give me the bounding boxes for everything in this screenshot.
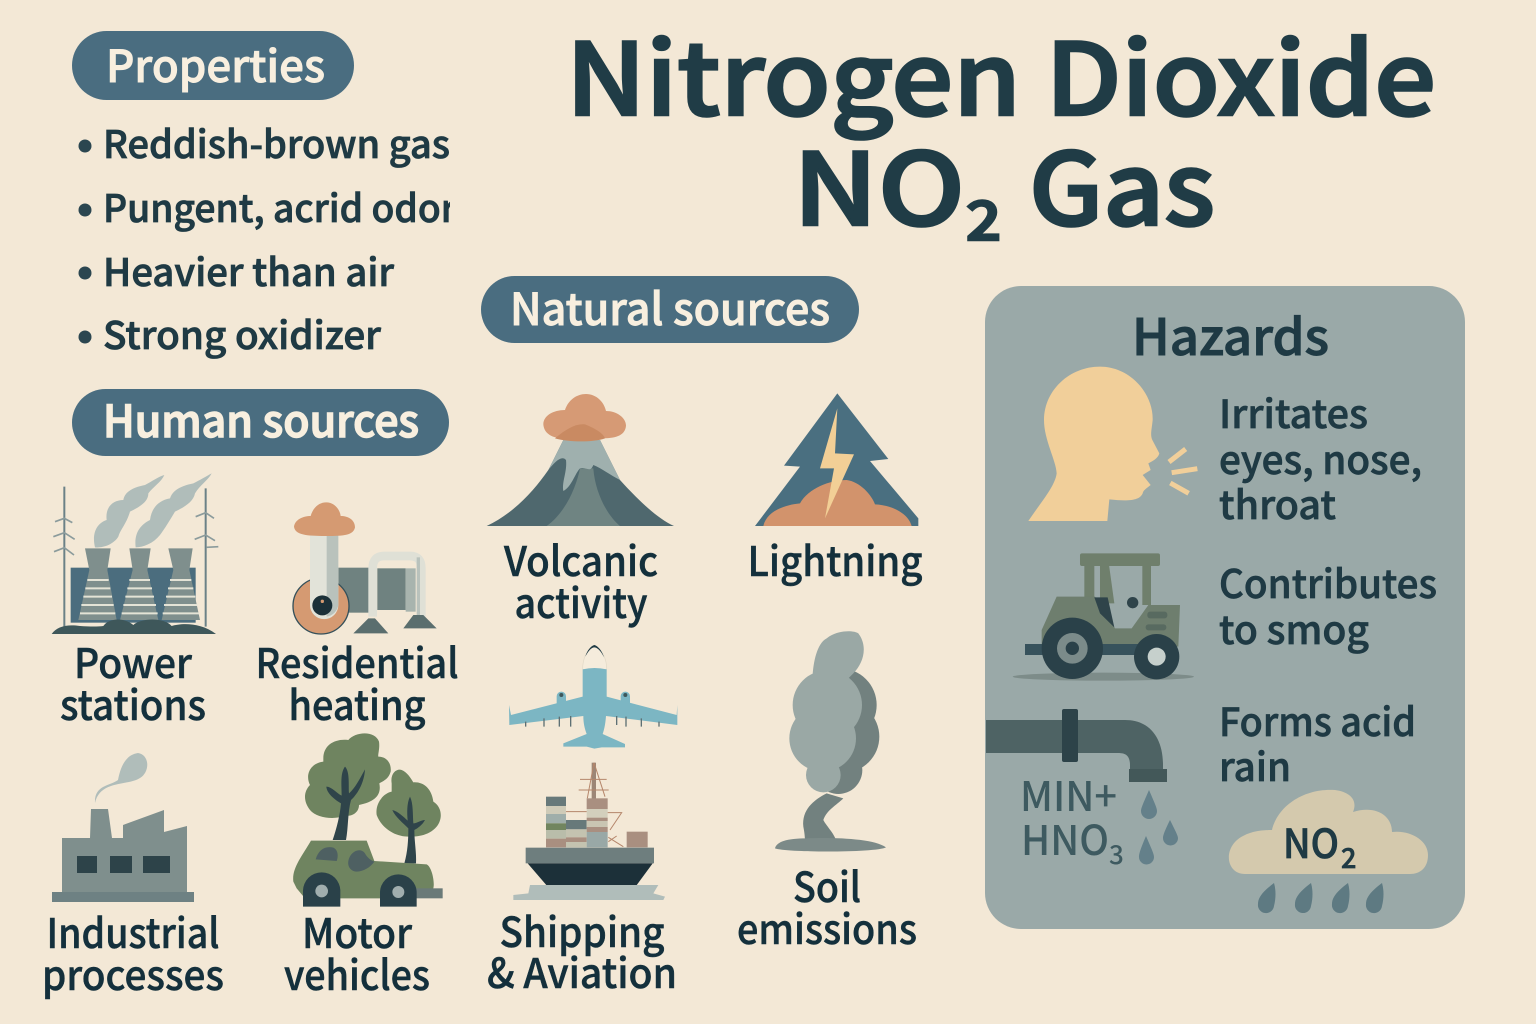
label: Power stations: stations [60,672,206,732]
label: Soil emissions: emissions [737,896,917,956]
text: contributes to smog: to smog [1219,600,1369,656]
heading: Hazards: Hazards [1132,298,1329,370]
icon: NO2 acid rain cloud: 2 [1341,837,1356,876]
label: Power stations [60,630,206,732]
icon: lightning [755,393,918,526]
text: forms acid rain [1219,692,1416,793]
label: Residential heating: Residential [256,630,458,690]
properties list [78,114,456,360]
icon: airplane [509,645,677,749]
icon: pipe with drips [986,709,1178,864]
text: irritates [1219,384,1422,531]
properties list: Pungent, acrid odor [103,178,456,233]
label: Motor vehicles: Motor [302,900,412,960]
label: Volcanic activity: activity [514,570,648,630]
icon: head [1028,367,1197,521]
title: NO [793,109,965,254]
text: forms acid rain: rain [1219,737,1291,793]
properties list: Heavier than air [103,242,394,297]
icon: soil emissions plume [775,631,886,851]
label: Volcanic activity: Volcanic [503,528,658,588]
label: Soil emissions: Soil [793,854,861,914]
text: contributes to smog [1219,554,1437,656]
panel: hazards [985,286,1465,929]
text: MIN+ HNO3: MIN+ [1020,763,1117,823]
properties list: Reddish-brown gas [103,114,450,169]
label: Volcanic activity [503,528,658,630]
label: Shipping & Aviation [487,899,677,1000]
text: MIN+ HNO3: HNO [1021,807,1109,867]
label: Soil emissions [737,854,917,956]
label: Power stations: Power [74,630,192,690]
label: Shipping & Aviation: Shipping [500,899,665,959]
heading: Human sources: Human sources [103,386,419,450]
title [566,0,1436,256]
label: Industrial processes: processes [42,942,224,1002]
text: irritates: throat [1219,475,1336,531]
label: Motor vehicles [284,900,430,1002]
label: Residential heating: heating [288,672,426,732]
icon: motor vehicle and trees [293,733,443,907]
label: Motor vehicles: vehicles [284,942,430,1002]
title: Gas [1029,109,1215,254]
text: contributes to smog: Contributes [1219,554,1437,610]
label: Residential heating [256,630,458,732]
heading: Properties: Properties [106,31,325,95]
text: irritates: Irritates [1219,384,1368,440]
icon: cargo ship [513,763,665,900]
icon: factory [52,753,194,902]
icon: NO2 acid rain cloud [1229,790,1428,913]
text: forms acid rain: Forms acid [1219,692,1416,748]
icon: residential heating [293,502,437,634]
properties list: Strong oxidizer [103,305,381,360]
text: MIN+ HNO3: 3 [1109,835,1124,872]
label: Lightning: Lightning [748,528,923,588]
icon: power station [52,473,218,634]
text: MIN+ HNO3 [1020,763,1124,872]
title: Nitrogen Dioxide [566,0,1436,144]
label: Industrial processes [42,900,224,1002]
heading: Natural sources: Natural sources [510,274,830,338]
title: 2 [966,177,1001,256]
icon: tractor [1013,553,1194,681]
icon: volcano [487,394,674,526]
text: irritates: eyes, nose, [1219,430,1422,486]
icon: NO2 acid rain cloud: NO [1283,812,1339,870]
label: Industrial processes: Industrial [46,900,220,960]
label: Shipping & Aviation: & Aviation [487,940,677,1000]
